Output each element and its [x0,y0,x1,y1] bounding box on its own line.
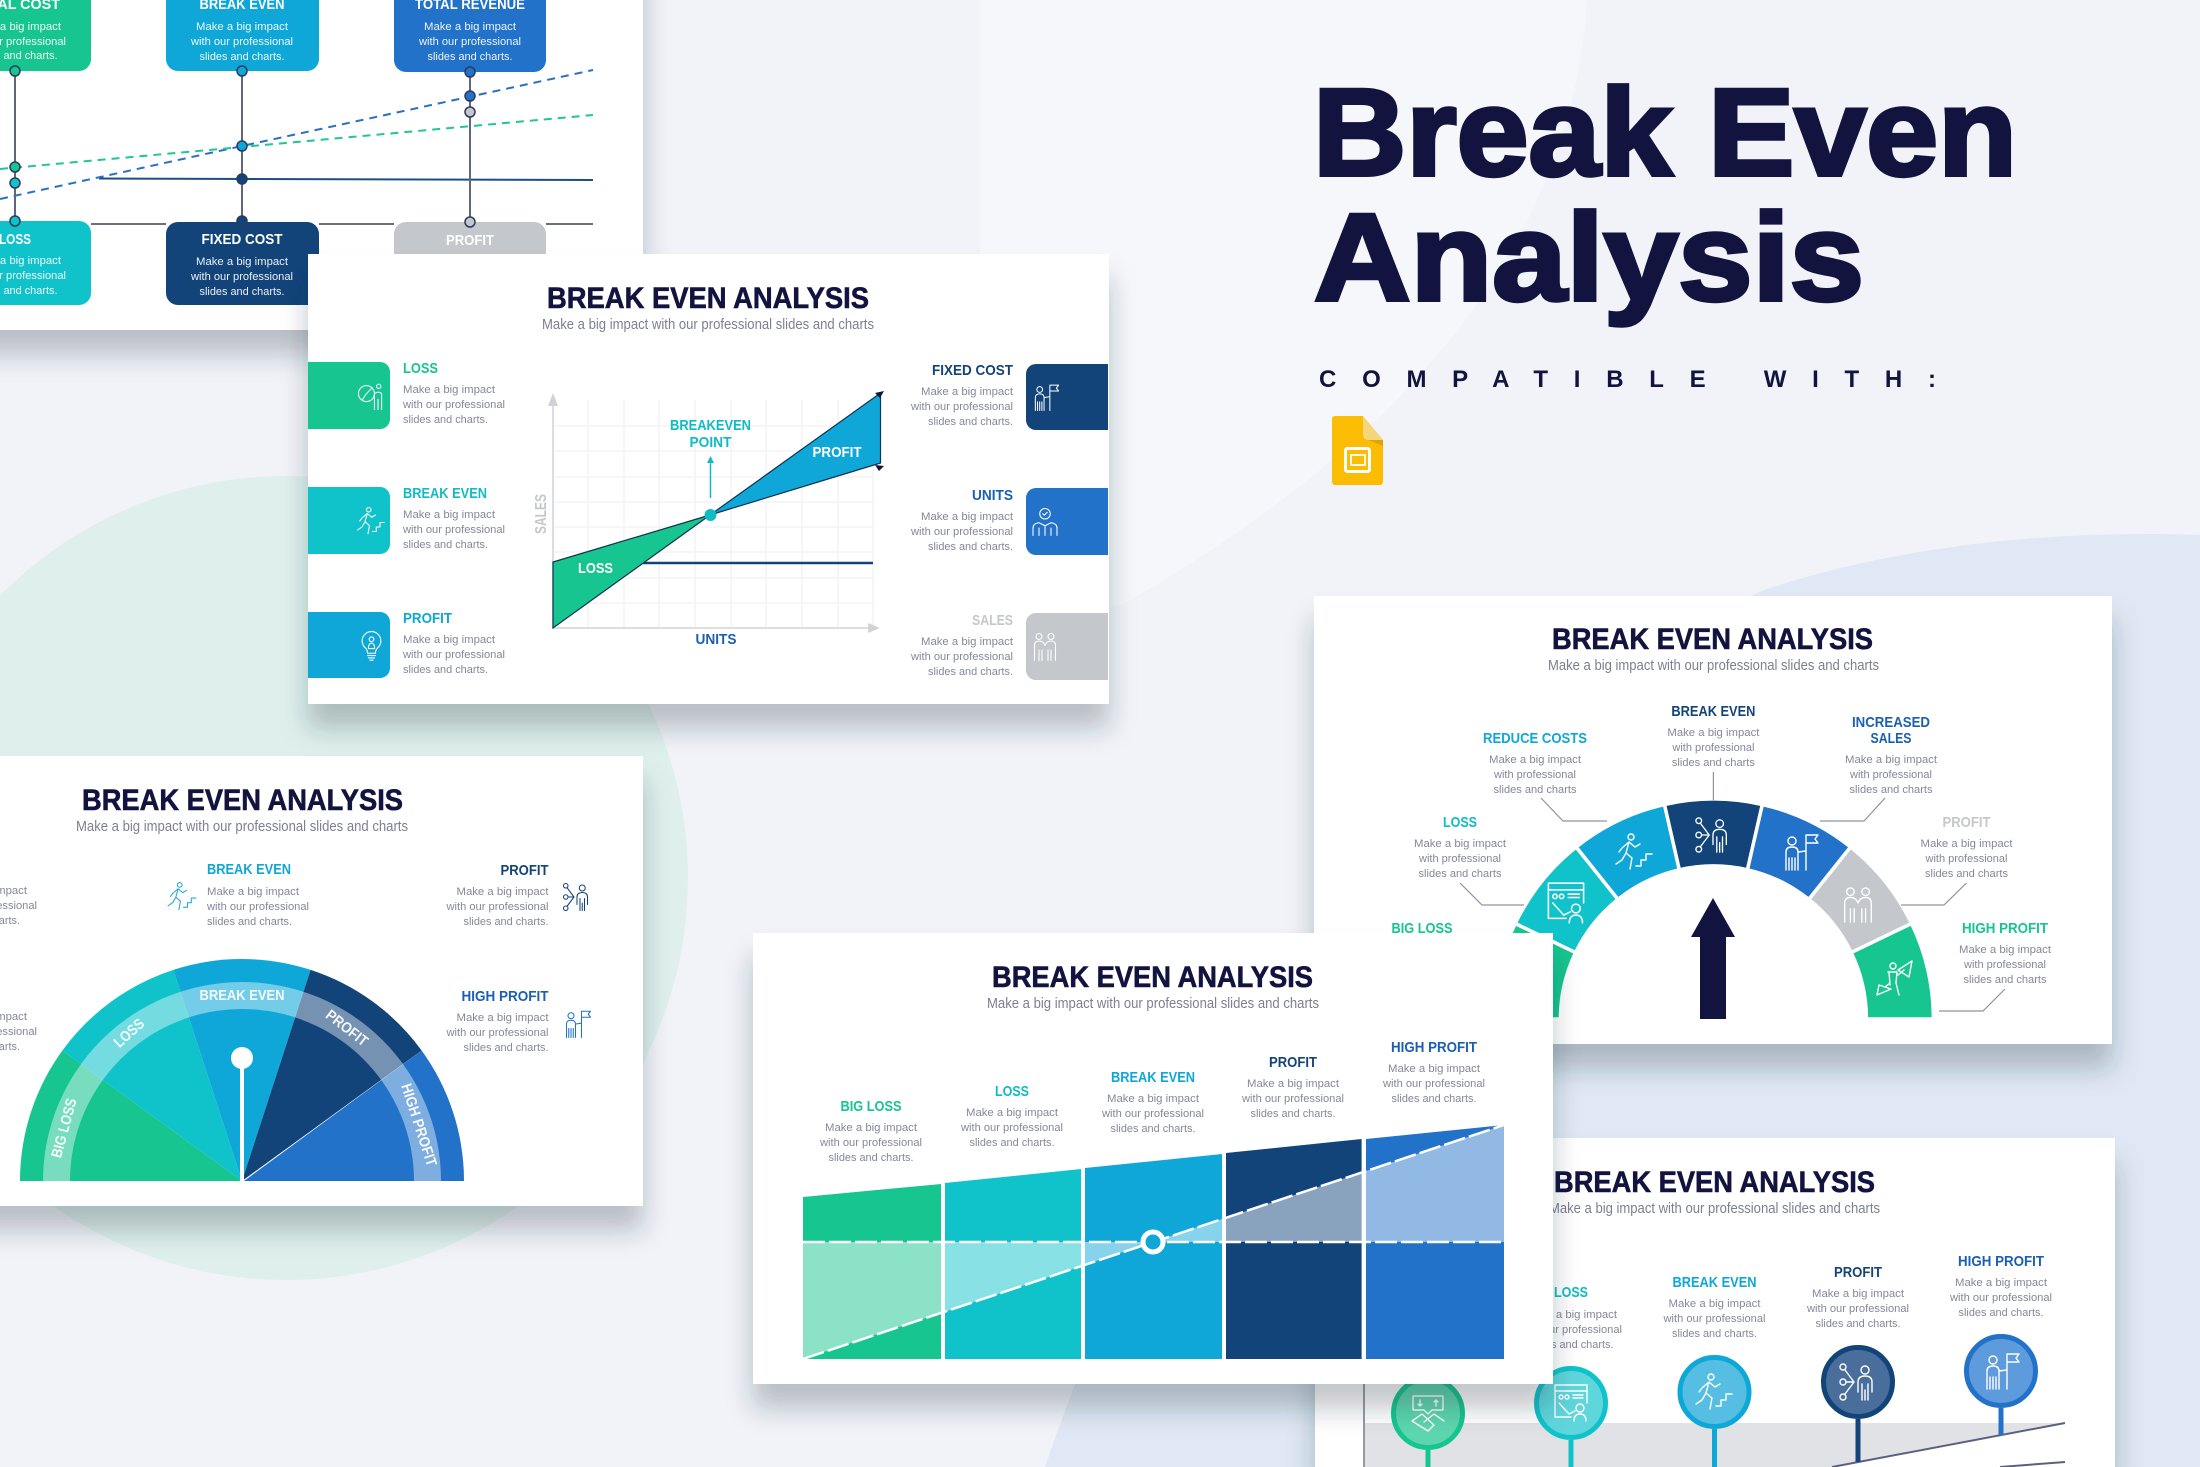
title [1313,64,2017,327]
label: high profit: Make a big impact [1959,944,2051,956]
ground area [1364,1384,2065,1467]
card: total revenue: Make a big impact [424,21,516,33]
label: profit: slides and charts [1925,868,2008,880]
label: profit [1920,814,2012,880]
label: break even: slides and charts [1672,757,1755,769]
label: high profit: with professional [1963,959,2046,971]
label: break even: BREAK EVEN [207,861,291,878]
chart: semicircle gauge: BIG LOSS [48,1096,81,1160]
pin: break even: Make a big impact [1668,1298,1760,1310]
label: profit: slides and charts. [464,916,548,928]
label: increased sales: slides and charts [1850,784,1933,796]
heading [542,282,874,333]
label: break even: with our professional [206,901,309,913]
tab: break even: slides and charts. [403,539,488,551]
card: fixed cost [166,222,319,305]
label: reduce costs: with professional [1493,769,1576,781]
tab: units: slides and charts. [928,541,1013,553]
label: profit: PROFIT [1942,814,1990,831]
label: high profit: HIGH PROFIT [1391,1039,1477,1056]
label: big loss: with our professional [819,1137,922,1149]
label: break even: with our professional [1101,1108,1204,1120]
heading: BREAK EVEN ANALYSIS [1554,1166,1875,1199]
card: total revenue: slides and charts. [428,51,512,63]
title: Break Even [1313,64,2017,202]
pin: high profit: with our professional [1949,1292,2052,1304]
label: reduce costs: REDUCE COSTS [1483,730,1587,747]
pin: break even: slides and charts. [1672,1328,1757,1340]
card: loss: LOSS [0,231,31,248]
label: profit: Make a big impact [456,886,548,898]
card: break even: slides and charts. [200,51,284,63]
slide: milestone pins [1315,1138,2115,1467]
label: loss: slides and charts [1418,868,1502,880]
label: break even: slides and charts. [1110,1123,1196,1135]
tab: profit: PROFIT [403,610,452,627]
tab: sales: slides and charts. [928,666,1013,678]
tab: profit: with our professional [402,649,505,661]
card: fixed cost: Make a big impact [196,256,288,268]
pin: high profit: slides and charts. [1958,1307,2044,1319]
label: break even: slides and charts. [207,916,292,928]
slide: gauge [0,756,643,1206]
label: increased sales: INCREASED [1852,714,1930,731]
label: increased sales: with professional [1849,769,1932,781]
label: profit: with our professional [445,901,548,913]
tab: fixed cost: Make a big impact [921,386,1013,398]
tab: units: Make a big impact [921,511,1013,523]
label: increased sales [1845,714,1937,796]
slide: break even graph [308,254,1109,704]
card: break even: Make a big impact [196,21,288,33]
chart: columns [803,1125,1504,1359]
label: break even: Make a big impact [1667,727,1759,739]
pin: high profit: Make a big impact [1955,1277,2047,1289]
heading [76,784,408,835]
heading: Make a big impact with our professional slides and charts [1549,1201,1880,1217]
label: break even [1101,1069,1204,1135]
label: high profit: with our professional [1382,1078,1485,1090]
label: high profit: slides and charts [1964,974,2047,986]
label: high profit: Make a big impact [456,1012,548,1024]
label: high profit [1382,1039,1485,1105]
tab: fixed cost: slides and charts. [928,416,1013,428]
label: high profit: Make a big impact [1388,1063,1480,1075]
label: profit: PROFIT [500,862,548,879]
heading: Make a big impact with our professional slides and charts [542,317,874,333]
label: high profit: HIGH PROFIT [1962,920,2048,937]
tab: break even: with our professional [402,524,505,536]
label: profit: Make a big impact [1920,838,2012,850]
card: fixed cost: FIXED COST [202,231,282,248]
tab: fixed cost: with our professional [910,401,1013,413]
label: profit: Make a big impact [1247,1078,1339,1090]
tab: units: with our professional [910,526,1013,538]
chart: semicircle gauge: PROFIT [322,1007,371,1050]
pin: profit: slides and charts. [1816,1318,1900,1330]
label: break even: Make a big impact [1107,1093,1199,1105]
tab: fixed cost: FIXED COST [932,362,1013,379]
label: big loss: BIG LOSS [1392,920,1452,937]
icon: slides file [1332,416,1383,485]
label: high profit [445,988,590,1054]
chart: break even graph: BREAKEVEN [670,417,751,434]
chart: break even graph [533,391,884,648]
card: total revenue [394,0,546,72]
tab: loss: Make a big impact [403,384,495,396]
heading: Make a big impact with our professional slides and charts [1548,658,1879,674]
tab: loss: slides and charts. [403,414,488,426]
label: big loss: slides and charts. [828,1152,914,1164]
label: high profit [1959,920,2051,986]
pin: profit [1806,1264,1909,1462]
label: high profit: slides and charts. [1392,1093,1476,1105]
label: loss: with our professional [960,1122,1063,1134]
label: loss [960,1083,1063,1149]
chart: break even graph: LOSS [578,560,613,577]
tab: loss: LOSS [403,360,438,377]
heading: BREAK EVEN ANALYSIS [992,961,1313,994]
pin: break even [1662,1274,1766,1467]
label: big loss [819,1098,922,1164]
label: break even [168,861,309,928]
label: high profit: HIGH PROFIT [462,988,548,1005]
chart: break even graph: SALES [533,494,550,534]
tab: sales [910,612,1108,680]
tab: sales: Make a big impact [921,636,1013,648]
label: big loss: BIG LOSS [840,1098,902,1115]
tab: break even [308,485,505,554]
label: break even: with professional [1671,742,1754,754]
label: loss: Make a big impact [966,1107,1058,1119]
heading: Make a big impact with our professional slides and charts [76,819,408,835]
chart: semicircle gauge: LOSS [111,1015,148,1051]
pin: big loss [1394,1378,1462,1467]
heading [1548,623,1879,674]
label: increased sales: Make a big impact [1845,754,1937,766]
clipped left text blocks [0,885,37,1053]
label: loss: LOSS [1443,814,1477,831]
tab: break even: BREAK EVEN [403,485,487,502]
tab: units: UNITS [972,487,1013,504]
label: break even: Make a big impact [207,886,299,898]
pin: loss: Make a big impact [1525,1309,1617,1321]
label: break even [1667,703,1759,769]
chart: semicircle gauge: BREAK EVEN [200,987,284,1004]
arc icons [1548,818,1912,995]
leader lines [1460,772,2005,1011]
label: profit: with professional [1924,853,2008,865]
label: profit [445,862,588,928]
label: big loss: Make a big impact [825,1122,917,1134]
label: break even: BREAK EVEN [1111,1069,1195,1086]
title: Analysis [1314,189,1864,327]
heading: BREAK EVEN ANALYSIS [547,282,869,315]
heading [1549,1166,1880,1217]
chart: break even graph: PROFIT [812,444,862,461]
card: fixed cost: slides and charts. [200,286,284,298]
slide: top-left break even lines [0,0,643,330]
pin: loss [1519,1284,1622,1467]
tab: break even: Make a big impact [403,509,495,521]
pin: profit: with our professional [1806,1303,1909,1315]
heading: BREAK EVEN ANALYSIS [1552,623,1873,656]
card: total revenue: with our professional [418,36,521,48]
card: fixed cost: with our professional [190,271,293,283]
pin: profit: Make a big impact [1812,1288,1904,1300]
tab: units [910,487,1108,555]
chart: semicircle gauge [20,959,464,1181]
label: high profit: with our professional [445,1027,548,1039]
card: loss [0,221,91,305]
chart lines [0,66,593,227]
tab: profit: slides and charts. [403,664,488,676]
heading: BREAK EVEN ANALYSIS [82,784,403,817]
label: profit: slides and charts. [1250,1108,1336,1120]
tab: sales: SALES [972,612,1013,629]
tab: loss [308,360,505,429]
pin: break even: with our professional [1662,1313,1766,1325]
card: total cost [0,0,91,71]
tab: profit [308,610,505,678]
pin: loss: LOSS [1554,1284,1588,1301]
label: high profit: slides and charts. [464,1042,548,1054]
tab: sales: with our professional [910,651,1013,663]
label: loss [1414,814,1506,880]
tab: loss: with our professional [402,399,505,411]
label: loss: LOSS [995,1083,1029,1100]
label: reduce costs: Make a big impact [1489,754,1581,766]
label: reduce costs: slides and charts [1494,784,1577,796]
label: loss: slides and charts. [970,1137,1054,1149]
label: loss: with professional [1418,853,1501,865]
pin: loss: slides and charts. [1528,1339,1614,1351]
label: profit: with our professional [1241,1093,1344,1105]
pin: loss: with our professional [1519,1324,1622,1336]
heading: Make a big impact with our professional slides and charts [987,996,1319,1012]
pin: high profit [1949,1253,2052,1435]
tab: fixed cost [910,362,1108,430]
arrow [1691,898,1735,1019]
slide: arc [1314,596,2112,1044]
chart: segmented arc [1493,799,1933,1019]
label: profit [1241,1054,1344,1120]
chart: break even graph: UNITS [696,631,736,648]
heading [987,961,1319,1012]
label: profit: PROFIT [1269,1054,1317,1071]
card: break even [166,0,319,71]
card: profit [394,222,546,305]
tab: profit: Make a big impact [403,634,495,646]
subtitle: compatible with: COMPATIBLE WITH: [1319,366,1936,393]
label: loss: Make a big impact [1414,838,1506,850]
slide: staircase columns [753,933,1553,1384]
label: break even: BREAK EVEN [1671,703,1755,720]
pin: high profit: HIGH PROFIT [1958,1253,2044,1270]
chart: break even graph: POINT [690,434,732,451]
label: increased sales: SALES [1870,730,1912,747]
chart: semicircle gauge: HIGH PROFIT [397,1082,440,1169]
pin: profit: PROFIT [1834,1264,1882,1281]
card: profit: PROFIT [446,232,494,249]
label: reduce costs [1483,730,1587,796]
pin: break even: BREAK EVEN [1672,1274,1756,1291]
card: break even: with our professional [190,36,293,48]
